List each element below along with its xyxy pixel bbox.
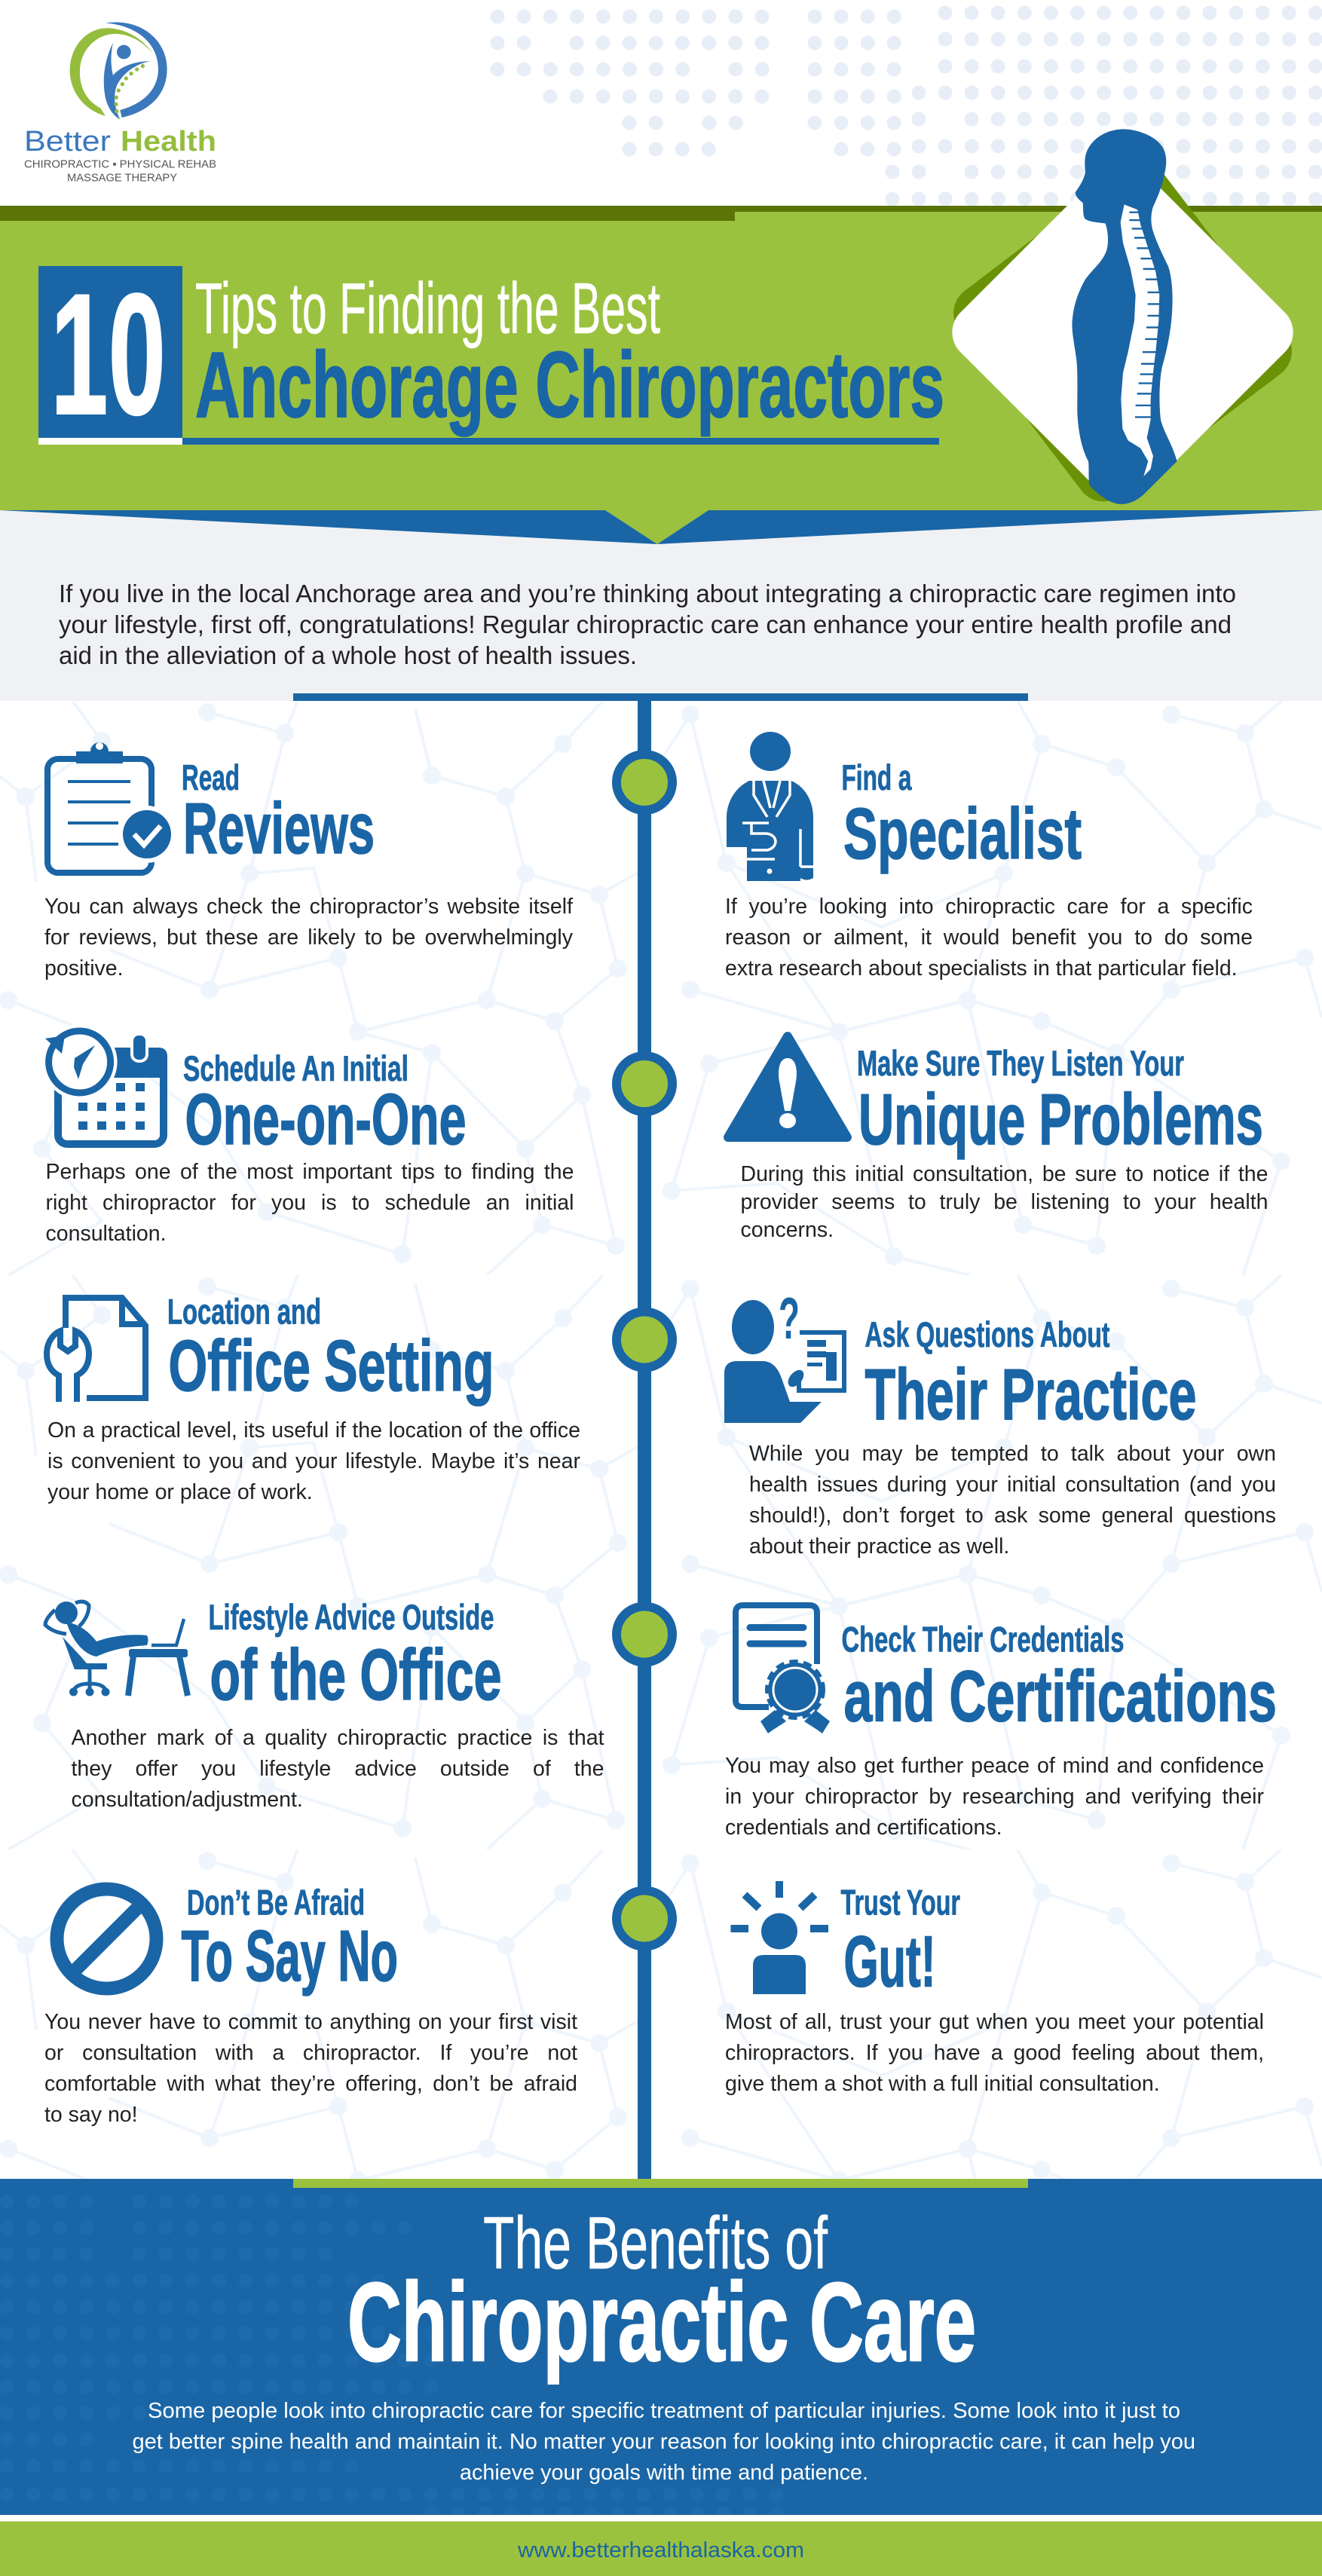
icon: person with rays [731, 1881, 828, 1994]
text block [749, 1439, 1276, 1567]
website footer [0, 2515, 1322, 2576]
heading: Ask Questions About [865, 1314, 1110, 1354]
icon: person with question and report: ? [779, 1285, 800, 1351]
text block: chiropractors. If you have a good feeling about them, [725, 2041, 1264, 2065]
title number box [38, 258, 182, 451]
title [182, 268, 944, 445]
heading: Make Sure They Listen Your [857, 1043, 1184, 1083]
panel: Find a Specialist [725, 732, 1253, 986]
heading: of the Office [210, 1635, 502, 1715]
text block [725, 892, 1253, 986]
icon: certificate with seal [736, 1605, 830, 1733]
text block: in your chiropractor by researching and verifying their [725, 1785, 1264, 1809]
heading: Reviews [183, 788, 375, 869]
text block: consultation. [45, 1222, 167, 1246]
text block: or consultation with a chiropractor. If you’re not [44, 2041, 577, 2065]
text block: should!), don’t forget to ask some general questions [749, 1504, 1276, 1528]
central timeline [293, 693, 1028, 2179]
heading: Location and [167, 1292, 321, 1331]
heading: Schedule An Initial [183, 1048, 409, 1088]
panel: Trust Your Gut! [725, 1881, 1264, 2101]
text block [44, 892, 573, 986]
heading [347, 2201, 976, 2385]
text block: Most of all, trust your gut when you meet your potential [725, 2010, 1264, 2034]
text block: is convenient to you and your lifestyle. Maybe it’s near [47, 1449, 580, 1473]
icon: warning triangle [728, 1036, 847, 1137]
text block: consultation/adjustment. [71, 1788, 303, 1812]
heading: Gut! [844, 1922, 936, 2002]
text block [45, 1157, 574, 1251]
text block: they offer you lifestyle advice outside of the [71, 1757, 604, 1781]
heading [841, 1883, 960, 2002]
text block: You may also get further peace of mind and confidence [725, 1754, 1264, 1778]
text block [725, 2007, 1264, 2101]
intro paragraph: your lifestyle, first off, congratulations! Regular chiropractic care can enhance your entire health profile and [59, 610, 1232, 638]
text block [47, 1415, 580, 1510]
icon: clock and calendar [42, 1024, 167, 1144]
text block: Some people look into chiropractic care for specific treatment of particular injuries. Some look into it just to [148, 2399, 1180, 2423]
title number box: 10 [50, 258, 166, 451]
intro paragraph [59, 580, 1236, 669]
intro paragraph: aid in the alleviation of a whole host of health issues. [59, 641, 637, 669]
text block [133, 2399, 1195, 2485]
panel: Location and Office Setting [47, 1292, 580, 1510]
logo: Better Health: Health [121, 126, 216, 158]
text block [71, 1723, 604, 1817]
blue chevron [0, 510, 1322, 544]
title: Anchorage Chiropractors [195, 334, 944, 437]
text block [44, 2007, 577, 2134]
icon: clipboard with check [47, 742, 176, 873]
logo: Better Health: CHIROPRACTIC ▪ PHYSICAL REHAB [24, 158, 216, 170]
text block: to say no! [44, 2103, 138, 2127]
heading [208, 1597, 502, 1715]
text block: health issues during your initial consultation (and you [749, 1473, 1276, 1497]
title: Tips to Finding the Best [195, 268, 660, 349]
heading [183, 1048, 466, 1160]
icon: relaxed person at desk [45, 1602, 188, 1696]
text block: concerns. [740, 1218, 834, 1242]
text block: provider seems to truly be listening to your health [740, 1190, 1268, 1214]
text block: positive. [44, 956, 124, 981]
heading [167, 1292, 494, 1406]
icon: document and wrench [47, 1298, 145, 1402]
heading: Don’t Be Afraid [187, 1883, 365, 1922]
icon: person with question and report [724, 1285, 844, 1423]
logo: Better Health [24, 23, 216, 185]
text block: for reviews, but these are likely to be overwhelmingly [44, 925, 573, 950]
text block: If you’re looking into chiropractic care for a specific [725, 895, 1253, 919]
text block: get better spine health and maintain it. No matter your reason for looking into chiropractic care, it can help you [133, 2430, 1195, 2454]
text block [725, 1751, 1264, 1845]
heading [841, 757, 1082, 874]
text block: On a practical level, its useful if the location of the office [47, 1418, 580, 1442]
text block: While you may be tempted to talk about your own [749, 1442, 1276, 1466]
heading: Office Setting [169, 1326, 494, 1406]
text block: comfortable with what they’re offering, don’t be afraid [44, 2072, 577, 2096]
heading: Trust Your [841, 1883, 960, 1922]
heading: Chiropractic Care [347, 2260, 976, 2385]
logo: Better Health: Better [24, 126, 111, 158]
panel: Check Their Credentials and Certifications [725, 1605, 1277, 1845]
text block: credentials and certifications. [725, 1816, 1002, 1840]
website footer: www.betterhealthalaska.com [517, 2538, 804, 2562]
heading: Lifestyle Advice Outside [208, 1597, 494, 1637]
text block: right chiropractor for you is to schedule an initial [45, 1191, 574, 1215]
panel: Schedule An Initial One-on-One [42, 1024, 574, 1251]
panel: Don't Be Afraid To Say No [44, 1883, 577, 2134]
text block: reason or ailment, it would benefit you to do some [725, 925, 1253, 950]
heading: Check Their Credentials [841, 1619, 1125, 1660]
hero: spine silhouette in diamond [941, 129, 1305, 514]
heading: To Say No [181, 1916, 398, 1996]
icon: prohibition sign [57, 1889, 157, 1988]
text block: achieve your goals with time and patience. [460, 2461, 868, 2485]
heading: Specialist [843, 794, 1082, 874]
text block: Another mark of a quality chiropractic practice is that [71, 1726, 604, 1750]
heading [857, 1043, 1263, 1160]
text block: Perhaps one of the most important tips to finding the [45, 1160, 574, 1184]
text block: You can always check the chiropractor’s website itself [44, 895, 573, 919]
heading [841, 1619, 1277, 1736]
heading: One-on-One [185, 1079, 466, 1160]
text block: You never have to commit to anything on your first visit [44, 2010, 577, 2034]
icon: doctor [727, 732, 813, 881]
logo: Better Health: MASSAGE THERAPY [67, 172, 177, 184]
panel: Ask Questions About Their Practice [724, 1285, 1276, 1567]
text block: give them a shot with a full initial consultation. [725, 2072, 1160, 2096]
text block: extra research about specialists in that particular field. [725, 956, 1238, 981]
heading [181, 1883, 398, 1996]
text block: about their practice as well. [749, 1534, 1009, 1559]
intro paragraph: If you live in the local Anchorage area and you’re thinking about integrating a chiropractic care regimen into [59, 580, 1236, 607]
heading: The Benefits of [483, 2201, 828, 2284]
panel: benefits footer [0, 2179, 1322, 2515]
heading: Find a [841, 757, 912, 797]
grey intro background [0, 510, 1322, 701]
heading [865, 1314, 1197, 1435]
heading: Read [182, 757, 240, 797]
header banner [0, 206, 1322, 544]
panel: Read Reviews [44, 742, 573, 986]
text block [740, 1161, 1268, 1251]
panel: Make Sure They Listen [728, 1036, 1268, 1251]
text block: your home or place of work. [47, 1480, 313, 1504]
network background [0, 701, 1322, 2179]
panel: Lifestyle Advice Outside of the Office [45, 1597, 604, 1817]
text block: During this initial consultation, be sure to notice if the [740, 1162, 1268, 1186]
heading [182, 757, 375, 869]
